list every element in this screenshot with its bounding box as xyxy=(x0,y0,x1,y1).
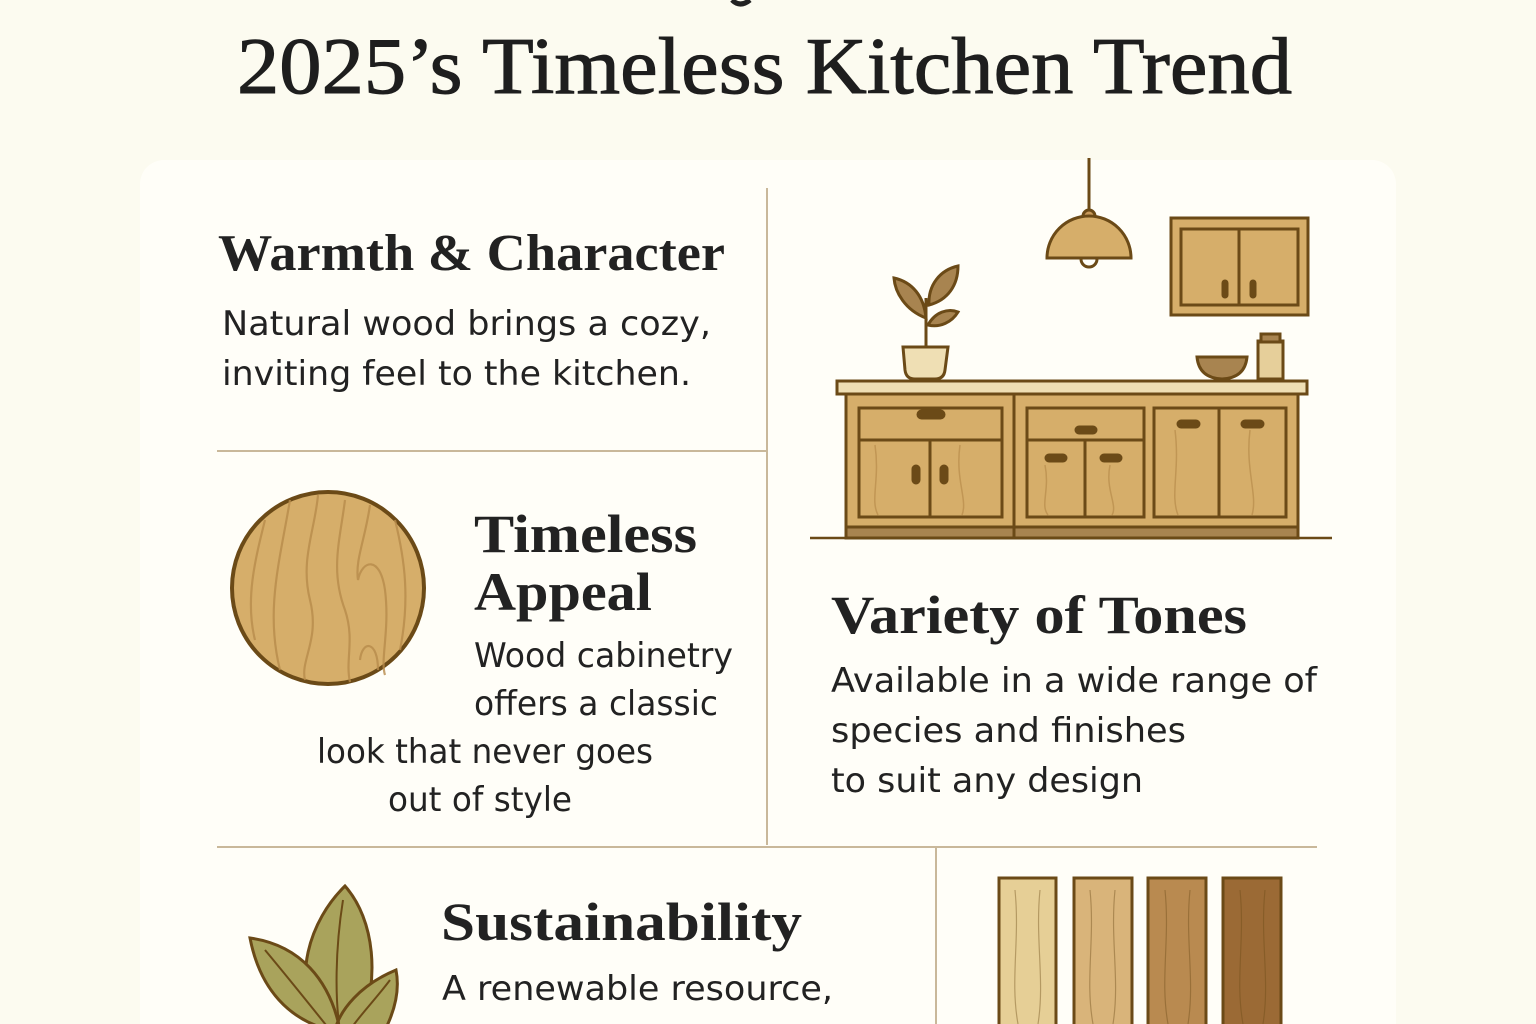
text: variety body: species and finishes xyxy=(831,711,1186,751)
text: timeless body: offers a classic xyxy=(474,684,718,724)
base cabinets xyxy=(846,394,1298,538)
panel: timeless appeal xyxy=(232,492,733,820)
text: warmth body: Natural wood brings a cozy, xyxy=(222,304,711,344)
text: warmth body: inviting feel to the kitchen. xyxy=(222,354,691,394)
heading: warmth: Warmth & Character xyxy=(218,225,725,282)
heading: timeless appeal xyxy=(474,504,697,622)
panel: sustainability xyxy=(250,886,833,1024)
panel: warmth & character xyxy=(218,225,725,394)
title descender fragment xyxy=(732,0,750,4)
heading: variety: Variety of Tones xyxy=(831,585,1247,645)
illustration: kitchen xyxy=(810,158,1332,538)
card background xyxy=(140,160,1396,1024)
bowl and jar xyxy=(1197,334,1283,379)
text: variety body: Available in a wide range of xyxy=(831,661,1318,701)
countertop xyxy=(837,381,1307,394)
plant xyxy=(894,266,958,379)
heading: timeless appeal: Appeal xyxy=(474,562,652,622)
heading: timeless appeal: Timeless xyxy=(474,504,697,564)
text: sustainability body: A renewable resource, xyxy=(442,969,833,1009)
text: warmth body xyxy=(222,304,711,394)
text: timeless body: out of style xyxy=(388,780,572,820)
wall cabinet xyxy=(1171,218,1308,315)
icon: wood circle xyxy=(232,492,424,684)
text: timeless body: Wood cabinetry xyxy=(474,636,733,676)
icon: leaves xyxy=(250,886,397,1024)
icon: wood tone planks xyxy=(999,878,1281,1024)
text: timeless body xyxy=(317,636,733,820)
text: variety body: to suit any design xyxy=(831,761,1143,801)
title: 2025’s Timeless Kitchen Trend xyxy=(237,23,1292,111)
text: variety body xyxy=(831,661,1318,801)
panel: variety of tones xyxy=(831,585,1318,801)
pendant lamp xyxy=(1047,158,1131,267)
floor line xyxy=(810,537,1332,539)
text: timeless body: look that never goes xyxy=(317,732,653,772)
heading: sustainability: Sustainability xyxy=(441,892,802,952)
